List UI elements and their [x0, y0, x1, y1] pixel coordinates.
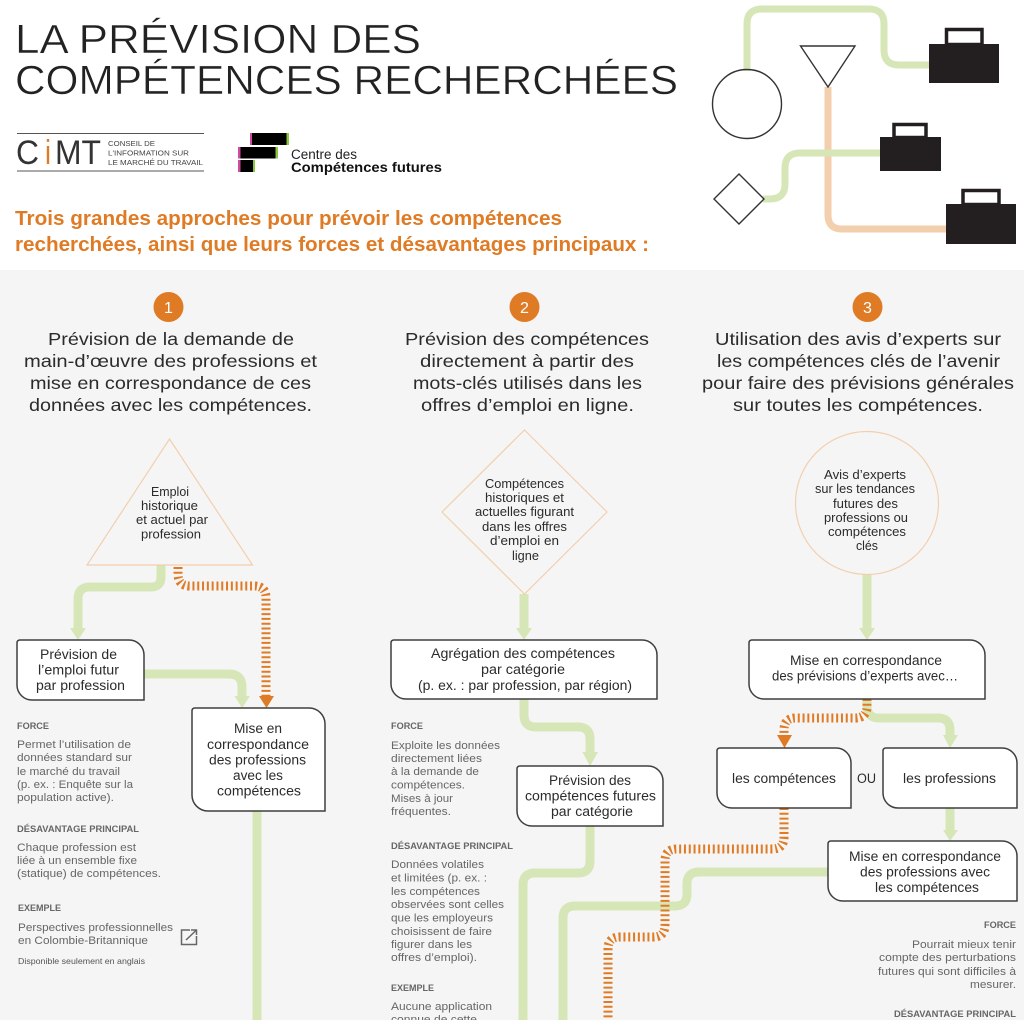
icon: external link — [182, 930, 196, 944]
text block: approach 1 disadvantage: (statique) de compétences. — [17, 868, 161, 880]
text block: approach 1 force: FORCE — [17, 721, 49, 732]
source shape: circle: compétences — [828, 525, 906, 539]
source shape: circle — [796, 432, 938, 574]
logo: CIMT: CONSEIL DE — [108, 139, 155, 148]
heading: approach 1: main-d’œuvre des professions et — [24, 351, 317, 371]
logo: CIMT: LE MARCHÉ DU TRAVAIL — [108, 158, 203, 167]
source shape: diamond: actuelles figurant — [475, 505, 575, 519]
heading: approach 2: directement à partir des — [420, 351, 634, 371]
logo: Centre des Compétences futures: Centre des — [291, 147, 357, 162]
text block: approach 3 force — [878, 920, 1017, 991]
number badge 2: 2 — [520, 300, 529, 317]
text block: approach 2 disadvantage: et limitées (p. ex. : — [391, 872, 487, 884]
source shape: circle: futures des — [833, 497, 898, 511]
text block: approach 2 disadvantage: offres d’emploi). — [391, 952, 477, 964]
heading: approach 1: Prévision de la demande de — [48, 329, 294, 349]
source shape: diamond: Compétences — [485, 477, 564, 491]
connectors: green arrowheads — [70, 628, 958, 841]
number badge 1 — [154, 292, 184, 322]
text block: approach 1 disadvantage: DÉSAVANTAGE PRINCIPAL — [17, 824, 139, 835]
text block: approach 3 force: compte des perturbations — [879, 952, 1016, 964]
source shape: triangle: historique — [141, 499, 198, 513]
text block: approach 3 disadvantage: DÉSAVANTAGE PRINCIPAL — [894, 1009, 1016, 1020]
heading: approach 1: mise en correspondance de ces — [30, 373, 311, 393]
source shape: diamond — [442, 430, 607, 594]
text block: approach 2 force — [391, 721, 500, 818]
text block: approach 1 force: Permet l’utilisation de — [17, 739, 131, 751]
source shape: circle: professions ou — [824, 511, 908, 525]
subtitle: Trois grandes approches pour prévoir les compétences — [15, 208, 562, 230]
text block: approach 2 force: FORCE — [391, 721, 423, 732]
box: mise en correspondance, approach 1: Mise en — [234, 721, 282, 736]
text block: approach 2 force: Mises à jour — [391, 793, 453, 805]
heading: approach 1: données avec les compétences. — [29, 395, 312, 415]
text block: approach 2 example — [391, 983, 492, 1020]
source shape: triangle — [87, 439, 252, 565]
box: mise en correspondance des prévisions: Mise en correspondance — [790, 653, 942, 668]
subtitle: recherchées, ainsi que leurs forces et désavantages principaux : — [15, 234, 649, 256]
heading: approach 3 — [702, 329, 1014, 415]
box: prévision de l'emploi: l’emploi futur — [38, 662, 120, 678]
logo: Centre des Compétences futures — [238, 133, 442, 175]
heading: approach 2: mots-clés utilisés dans les — [413, 373, 642, 393]
box: mise en correspondance des professions: Mise en correspondance — [849, 849, 1001, 864]
source shape: diamond: dans les offres — [482, 520, 567, 534]
source shape: triangle: Emploi — [151, 485, 189, 499]
text block: approach 2 example: EXEMPLE — [391, 983, 434, 994]
heading: approach 2 — [405, 329, 649, 415]
box: prévision de l'emploi — [17, 640, 144, 700]
box: prévision des compétences futures: Prévision des — [549, 773, 631, 788]
logo: CIMT: C — [16, 134, 39, 172]
text block: approach 3 force: mesurer. — [970, 979, 1016, 991]
source shape: circle: sur les tendances — [815, 482, 915, 496]
text block: approach 2 disadvantage: les compétences — [391, 886, 480, 898]
box: mise en correspondance, approach 1: des professions — [209, 752, 306, 768]
box: mise en correspondance, approach 1: compétences — [217, 784, 301, 798]
source shape: diamond: d’emploi en — [490, 534, 559, 548]
title: LA PRÉVISION DES — [15, 16, 421, 62]
number badge 1: 1 — [164, 300, 173, 317]
text block: approach 1 disadvantage: Chaque profession est — [17, 842, 137, 854]
logo: CIMT: i — [45, 134, 51, 172]
text block: approach 1 example — [18, 903, 173, 966]
box: agrégation des compétences: par catégorie — [481, 662, 565, 677]
text block: approach 1 disadvantage: liée à un ensemble fixe — [17, 855, 137, 867]
box: mise en correspondance des prévisions: des prévisions d’experts avec… — [772, 668, 958, 684]
box: mise en correspondance, approach 1: avec les — [233, 768, 283, 783]
text block: approach 3 force: futures qui sont difficiles à — [878, 966, 1017, 978]
source shape: diamond: ligne — [512, 549, 539, 563]
box: les compétences — [717, 748, 851, 808]
heading: approach 3: les compétences clés de l’avenir — [717, 351, 1000, 371]
box: prévision des compétences futures: compétences futures — [525, 788, 656, 804]
connectors: orange arrowheads — [259, 696, 792, 748]
number badge 2 — [510, 292, 540, 322]
box: les professions: les professions — [903, 771, 996, 786]
title: COMPÉTENCES RECHERCHÉES — [15, 57, 678, 103]
box: mise en correspondance, approach 1 — [192, 708, 325, 811]
text block: approach 2 disadvantage: choisissent de faire — [391, 926, 492, 938]
box: prévision des compétences futures: par catégorie — [551, 804, 633, 819]
logo: Centre des Compétences futures: Compétences futures — [291, 160, 442, 175]
text block: approach 2 disadvantage: DÉSAVANTAGE PRINCIPAL — [391, 841, 513, 852]
text block: approach 2 disadvantage: observées sont celles — [391, 899, 504, 911]
text block: approach 1 force — [17, 721, 134, 804]
heading: approach 3: pour faire des prévisions générales — [702, 373, 1014, 393]
connectors: long green flows — [78, 565, 950, 1020]
text block: approach 2 disadvantage: que les employeurs — [391, 912, 493, 924]
heading: approach 2: Prévision des compétences — [405, 329, 649, 349]
text block: approach 2 disadvantage: Données volatiles — [391, 859, 484, 871]
box: mise en correspondance des prévisions — [749, 640, 985, 699]
text block: approach 1 example: EXEMPLE — [18, 903, 61, 914]
logo: CIMT: L'INFORMATION SUR — [108, 148, 189, 158]
title — [15, 16, 678, 103]
logo: CIMT — [16, 134, 204, 172]
label: OU: OU — [857, 771, 876, 786]
box: mise en correspondance des professions: des professions avec — [860, 864, 990, 880]
text block: approach 1 disadvantage — [17, 824, 161, 880]
box: agrégation des compétences: (p. ex. : par profession, par région) — [418, 678, 632, 693]
text block: approach 2 disadvantage — [391, 841, 513, 964]
text block: approach 1 example: Disponible seulement en anglais — [18, 956, 145, 966]
text block: approach 2 force: à la demande de — [391, 766, 479, 778]
box: mise en correspondance, approach 1: correspondance — [207, 737, 309, 752]
text block: approach 1 force: (p. ex. : Enquête sur la — [17, 779, 134, 791]
source shape: diamond: historiques et — [485, 491, 565, 505]
box: mise en correspondance des professions — [828, 841, 1017, 901]
box: les compétences: les compétences — [732, 771, 836, 786]
header illustration — [712, 9, 1016, 244]
box: prévision de l'emploi: Prévision de — [40, 647, 117, 662]
number badge 3 — [852, 292, 882, 322]
text block: approach 1 example: Perspectives professionnelles — [18, 922, 173, 934]
box: agrégation des compétences: Agrégation des compétences — [431, 646, 615, 661]
text block: approach 2 force: Exploite les données — [391, 740, 500, 752]
heading: approach 3: sur toutes les compétences. — [733, 395, 983, 415]
box: agrégation des compétences — [391, 640, 657, 699]
text block: approach 2 force: directement liées — [391, 753, 482, 765]
text block: approach 2 force: compétences. — [391, 780, 465, 792]
text block: approach 3 force: FORCE — [984, 920, 1016, 931]
text block: approach 2 force: fréquentes. — [391, 806, 451, 818]
heading: approach 2: offres d’emploi en ligne. — [421, 395, 634, 415]
text block: approach 3 force: Pourrait mieux tenir — [912, 939, 1016, 951]
text block: approach 1 force: données standard sur — [17, 752, 132, 764]
text block: approach 2 example: Aucune application — [391, 1001, 492, 1013]
box: mise en correspondance des professions: les compétences — [875, 880, 979, 895]
heading: approach 3: Utilisation des avis d’experts sur — [715, 329, 1001, 349]
source shape: triangle: profession — [141, 528, 201, 542]
text block: approach 2 disadvantage: figurer dans les — [391, 939, 472, 951]
source shape: triangle: et actuel par — [136, 513, 208, 527]
heading: approach 1 — [24, 329, 317, 415]
text block: approach 1 force: le marché du travail — [17, 766, 120, 778]
box: prévision des compétences futures — [517, 766, 663, 826]
source shape: circle: Avis d’experts — [824, 468, 906, 482]
background panel — [0, 270, 1024, 1020]
number badge 3: 3 — [863, 300, 872, 317]
logo: CIMT: MT — [55, 134, 101, 172]
box: prévision de l'emploi: par profession — [36, 678, 125, 693]
box: les professions — [883, 748, 1017, 808]
subtitle — [15, 208, 649, 256]
text block: approach 1 force: population active). — [17, 792, 114, 804]
source shape: circle: clés — [856, 539, 878, 553]
connectors: dotted orange flows — [178, 567, 867, 1020]
text block: approach 1 example: en Colombie-Britannique — [18, 935, 148, 947]
